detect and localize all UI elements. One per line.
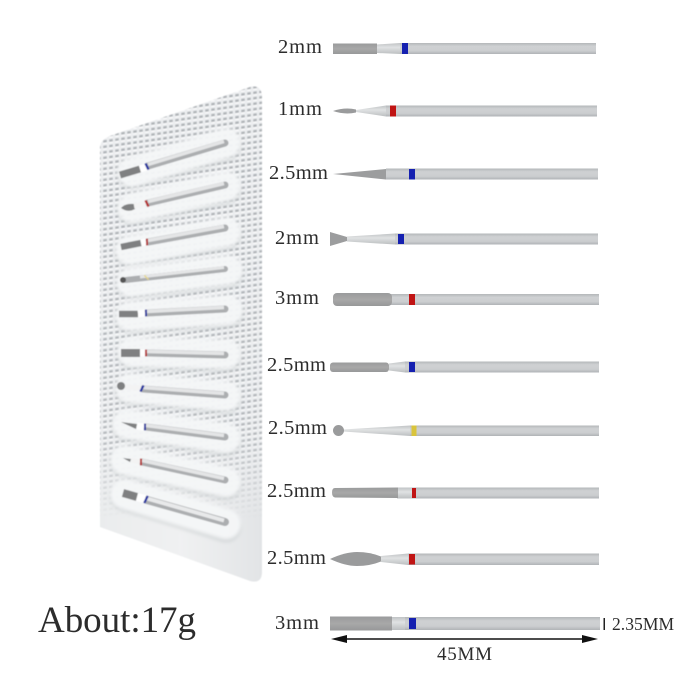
bit 4: 2mm [275,227,598,249]
bit 5: 3mm [275,287,599,309]
diameter tick [604,618,605,630]
diameter label: 2.35MM [612,614,674,634]
tray bit 7 [117,382,225,395]
bit 6: 2.5mm: 2.5mm [267,354,326,376]
tray bit 4 [120,268,225,283]
bit 9: 2.5mm: 2.5mm [267,547,326,569]
bit 3: 2.5mm: 2.5mm [269,162,328,184]
bit 2: 1mm [278,98,597,120]
bit 2: 1mm: 1mm [278,98,322,120]
bit 3: 2.5mm [269,162,598,184]
tray well shadows [125,146,228,527]
bit 9: 2.5mm [267,547,599,569]
weight label: About:17g [38,600,196,641]
bit 6: 2.5mm [267,354,599,376]
length arrow [331,635,598,643]
bit 1: 2mm: 2mm [278,36,322,58]
tray bit 5 [119,308,225,314]
tray bit 8 [121,422,225,437]
length label: 45MM [437,644,492,665]
blister tray with ten drill bits [100,86,262,582]
bit 8: 2.5mm: 2.5mm [267,480,326,502]
tray dimple texture [100,86,262,504]
bit 7: 2.5mm [268,417,599,439]
tray bit 10 [123,493,225,522]
tray bit 2 [121,184,225,211]
bit 10: 3mm: 3mm [275,612,319,634]
bit 4: 2mm: 2mm [275,227,319,249]
bit 5: 3mm: 3mm [275,287,319,309]
tray body [100,86,262,582]
bit 1: 2mm [278,36,596,58]
tray bit 6 [121,352,225,355]
tray wells [125,143,228,524]
tray bit 1 [120,142,225,175]
bit 7: 2.5mm: 2.5mm [268,417,327,439]
tray bit 9 [123,458,225,480]
bit 10: 3mm [275,612,600,634]
bit 8: 2.5mm [267,480,599,502]
tray bit 3 [121,226,225,247]
